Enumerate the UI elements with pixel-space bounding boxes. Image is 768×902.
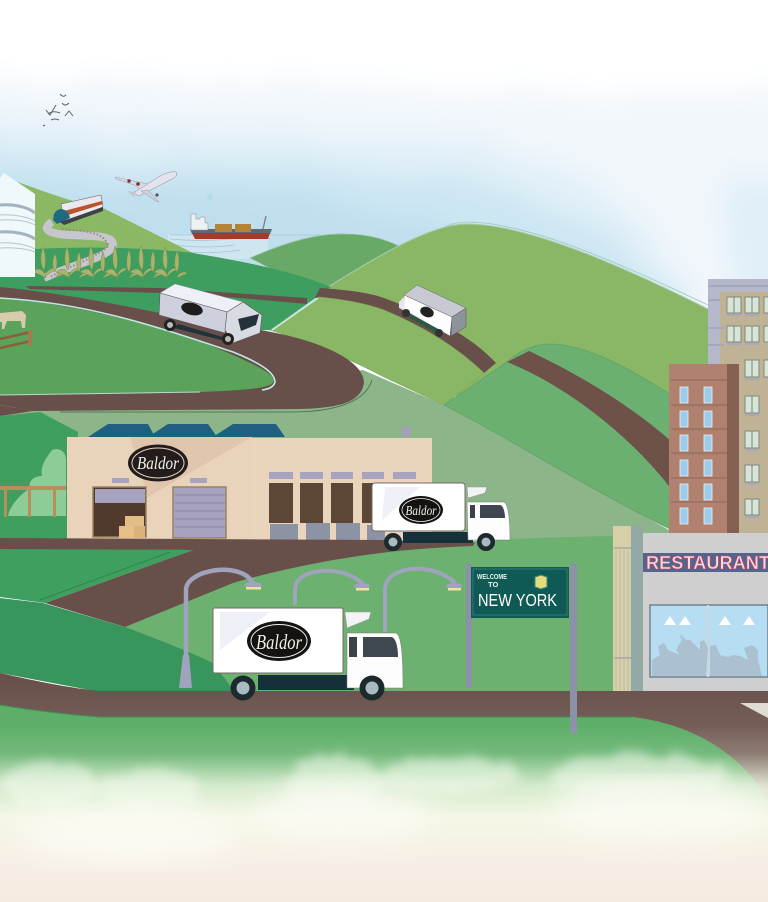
diners silhouettes (652, 635, 762, 676)
road: warehouse driveway (0, 538, 475, 627)
truck logo (247, 621, 311, 661)
hill: dark green behind warehouse (0, 412, 78, 540)
truck: right hill road (399, 285, 466, 337)
truck: upper left road (159, 284, 262, 345)
hill: right strip (444, 344, 672, 530)
curb (740, 703, 768, 718)
restaurant sign: RESTAURANT (646, 553, 768, 573)
solar roof panels (88, 424, 285, 437)
cow (0, 311, 26, 329)
truck logo: Baldor (256, 630, 303, 654)
tall apartment building (708, 279, 768, 539)
water (168, 235, 320, 259)
road: small bend (0, 405, 33, 416)
corn field (32, 246, 186, 278)
fence by warehouse (0, 486, 66, 517)
brick building (669, 364, 739, 533)
loading docks (269, 472, 416, 541)
field: lower left (0, 548, 193, 603)
hill: far left (12, 180, 195, 280)
road: winding farm road (0, 287, 364, 411)
sky (0, 0, 768, 340)
hill: grey green valley (0, 370, 669, 540)
hill: big right (320, 224, 710, 420)
restaurant (613, 526, 768, 691)
restaurant window (650, 605, 768, 677)
tree (8, 449, 66, 516)
truck: at warehouse (372, 483, 510, 551)
field: cow pasture (0, 298, 274, 395)
road: thin back lane (25, 286, 307, 304)
field: roadside verge (0, 700, 768, 902)
road: hill lane lower (507, 351, 672, 490)
hill: light green below lane (270, 297, 484, 405)
loading doors (93, 478, 226, 538)
hill: middle back (250, 234, 410, 300)
silo (0, 173, 35, 277)
road sign: WELCOME (477, 572, 507, 581)
band: dark green field (0, 248, 331, 335)
bottom watercolor fade (0, 725, 768, 902)
warehouse logo: Baldor (137, 453, 180, 473)
street lamps (179, 569, 462, 688)
train track (44, 222, 113, 278)
road sign (466, 564, 577, 733)
truck logo: Baldor (406, 504, 437, 519)
road sign: TO (488, 580, 498, 589)
road sign: NEW YORK (478, 590, 557, 610)
truck: foreground (213, 608, 403, 700)
birds (43, 94, 73, 126)
road: hill lane upper (315, 288, 496, 373)
train (53, 195, 103, 225)
cargo ship (190, 214, 272, 239)
airplane (115, 172, 177, 202)
fence (0, 330, 31, 348)
hill: dark foreground left (0, 598, 235, 692)
field: lower bright green (125, 536, 620, 695)
road: main highway (0, 673, 768, 800)
warehouse logo (128, 444, 188, 482)
warehouse (67, 424, 432, 541)
